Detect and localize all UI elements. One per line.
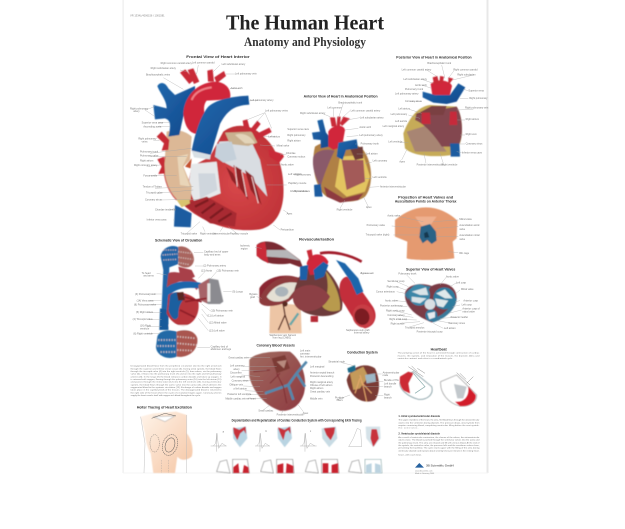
- labels: frontal view callouts: Chordae: [286, 152, 296, 155]
- labels: coronary callouts: Great cardiac vein: [228, 356, 249, 359]
- illustration: posterior heart: [403, 76, 465, 157]
- labels: circulation callouts: (13) Left valve: [209, 329, 225, 332]
- labels: circulation callouts: To head: [142, 272, 151, 275]
- text block: phase 1: empties remaining blood, completing ventricular filling before the next systole.: [398, 424, 480, 427]
- heading: anterior view: Anterior View of Heart in Anatomical Position: [304, 94, 378, 98]
- labels: circulation callouts: and arms: [143, 275, 154, 278]
- row 2: heart outlines and ventricles: [217, 459, 382, 473]
- labels: posterior view callouts: Left ventricle: [388, 141, 403, 144]
- poster sheet: [122, 0, 488, 474]
- labels: circulation callouts: (10) Pulmonary vein: [211, 309, 234, 312]
- labels: circulation callouts: (4) Tricuspid valve: [133, 318, 153, 321]
- labels: anterior view callouts: Brachiocephalic trunk: [338, 101, 363, 104]
- text block: circulation description: valve (6), it flows into the pulmonary trunk (7) and on into the right and left pulmonary: [131, 373, 222, 376]
- labels: superior view callouts: Anterior cusp of: [462, 307, 480, 310]
- labels: anterior view callouts: Left pulmonary artery: [359, 134, 384, 137]
- labels: anterior view callouts: Inferior vena cava: [290, 190, 310, 193]
- labels: frontal view callouts: Mitral valve: [277, 145, 290, 148]
- labels: coronary labels continued: Posterior descending: [310, 375, 334, 378]
- labels: circulation callouts: [133, 251, 244, 351]
- labels: superior view callouts: Aortic valve: [446, 276, 459, 279]
- illustration: coronary vessel heart: [249, 351, 307, 411]
- labels: frontal view callouts: Right common carotid artery: [161, 62, 193, 65]
- labels: revascularisation callouts: Internal artery: [354, 332, 370, 335]
- labels: projection callouts: Pulmonary valve: [367, 224, 386, 227]
- labels: superior view callouts: Coronary sinus: [448, 322, 466, 325]
- text block: phase 2: 2. Ventricular systole/atrial diastole: [398, 433, 441, 436]
- labels: frontal view callouts: Pulmonary trunk: [140, 151, 159, 154]
- text block: phase 2: As a result of ventricular contraction, the closure of the valves, the atrioventricular: [398, 436, 480, 439]
- labels: frontal view callouts: Left subclavian artery: [222, 63, 246, 66]
- labels: superior view callouts: Right atrial cusp: [389, 318, 408, 321]
- panel: projection of heart valves on anterior thorax: [366, 196, 480, 260]
- panel: posterior view of heart in anatomical position: [383, 55, 489, 167]
- labels: circulation callouts: (2) Pulmonary artery: [203, 265, 227, 268]
- labels: circulation callouts: ventricle: [140, 327, 150, 330]
- text block: circulation description: arteries (8). In the lungs (9) the blood releases carbon dioxide and takes up oxygen. It: [131, 375, 222, 378]
- labels: posterior view callouts: Coronary sinus: [466, 143, 483, 146]
- labels: coronary callouts: [225, 356, 309, 416]
- labels: anterior view callouts: Apex: [366, 206, 372, 209]
- text block: circulation description: through the superior and inferior venae cavae (3). During atrial systole, the blood flows: [131, 367, 222, 370]
- panel: frontal view of heart interior: [130, 55, 308, 235]
- labels: posterior view callouts: Right vein: [466, 133, 477, 136]
- labels: coronary labels continued: Right atrium: [310, 387, 323, 390]
- labels: coronary labels continued: Left marginal: [310, 366, 325, 369]
- labels: posterior view callouts: Left pulmonary: [391, 113, 408, 116]
- labels: posterior view callouts: Posterior interventricular: [417, 163, 444, 166]
- labels: frontal view callouts: Left common carotid: [192, 61, 215, 64]
- labels: coronary callouts: Posterior interventricular: [277, 413, 304, 416]
- text block: circulation description: systole, the blood flows through the aortic valve into the aorta (14), which delivers the: [131, 383, 222, 386]
- labels: superior view callouts: Coronary artery: [387, 314, 405, 317]
- labels: superior view callouts: Pulmonary trunk: [398, 272, 417, 275]
- labels: coronary labels continued: Obtuse of left atrium: [310, 384, 332, 387]
- labels: coronary callouts: Small cardiac: [258, 410, 274, 413]
- labels: posterior view callouts: Pulmonary trunk: [405, 88, 424, 91]
- logo: 3B Scientific: [415, 463, 454, 475]
- labels: frontal view callouts: artery: [133, 110, 140, 113]
- labels: frontal view callouts: [130, 61, 308, 235]
- labels: conduction callouts: Bundle of His: [384, 379, 400, 382]
- labels: frontal view callouts: Right subclavian artery: [151, 67, 177, 70]
- labels: posterior view callouts: Right subclavian: [457, 74, 476, 77]
- labels: circulation callouts: (14) Vena cava: [137, 299, 154, 302]
- labels: frontal view callouts: Right ventricle: [200, 232, 216, 235]
- labels: superior view callouts: Left cusp: [462, 303, 472, 306]
- labels: coronary callouts: Apex: [303, 412, 309, 415]
- labels: coronary callouts: artery: [233, 368, 240, 371]
- labels: frontal view callouts: Fossa ovalis: [143, 174, 158, 177]
- labels: conduction callouts: fibers: [337, 399, 343, 402]
- labels: superior view callouts: Conus arteriosus: [376, 291, 396, 294]
- labels: superior view callouts: Posterior aortic cusp: [380, 304, 403, 307]
- labels: coronary callouts: Circumflex: [230, 371, 242, 374]
- labels: revascularisation callouts: graft: [250, 296, 255, 299]
- labels: revascularisation callouts: Bypass: [249, 293, 258, 296]
- labels: revascularisation callouts: Saphenous vein graft: [346, 329, 370, 332]
- labels: frontal view callouts: Right pulmonary: [130, 107, 149, 110]
- labels: anterior view callouts: Right pulmonary: [287, 134, 306, 137]
- text block: heartbeat intro: muscle, the systole, and relaxation of the muscle, the diastole. Atria and: [398, 354, 480, 357]
- heading: projection of heart valves: Projection of Heart Valves and: [398, 196, 453, 200]
- labels: superior view callouts: Semilunar cusp: [387, 280, 405, 283]
- panel: holter tracing of heart excitation: [137, 405, 193, 473]
- heading: frontal view: Frontal View of Heart Interior: [186, 55, 251, 59]
- labels: frontal view callouts: Brachiocephalic veins: [146, 73, 171, 76]
- illustration: four valves: [405, 283, 457, 322]
- labels: frontal view callouts: Aortic arch: [231, 87, 243, 90]
- text block: phase 2: ventricular diastole and repeats about seventy times per minute in the resting heart.: [398, 449, 480, 452]
- text block: circulation description: [131, 365, 222, 397]
- labels: coronary callouts: Coronary sinus: [232, 380, 249, 383]
- labels: posterior view callouts: Inferior vena cava: [462, 151, 482, 154]
- text block: phase 1: [398, 415, 480, 430]
- text block: phase 1: valves into the ventricles during diastole. The pressure drops, atrial systole then: [398, 421, 480, 424]
- labels: circulation callouts: (12) Mitral valve: [209, 321, 227, 324]
- labels: conduction callouts: Right: [384, 394, 390, 397]
- labels: superior view callouts: Left cusp: [456, 282, 467, 285]
- labels: frontal view callouts: Superior vena cava: [142, 121, 164, 124]
- labels: circulation callouts: (13) Aorta: [201, 270, 213, 273]
- labels: superior view callouts: Right cusp: [387, 285, 399, 288]
- labels: anterior view callouts: Right coronary: [295, 173, 312, 176]
- labels: conduction callouts: Atrioventricular: [383, 371, 399, 374]
- text block: circulation description: Deoxygenated blood flows from the peripheral circulation (1) into the right atrium (2): [131, 365, 222, 368]
- labels: circulation callouts: Capillary bed of upper: [204, 251, 228, 254]
- heading: holter tracing: Holter Tracing of Heart Excitation: [137, 405, 192, 409]
- text block: phase 2: preventing the backflow. The cycle starts again with the filling of the atria during: [398, 447, 480, 450]
- labels: circulation callouts: (15) Pulmonary vein: [217, 270, 240, 273]
- labels: conduction callouts: node: [383, 374, 389, 377]
- labels: anterior view callouts: Left coronary: [373, 160, 388, 163]
- heading: heartbeat: Heartbeat: [431, 347, 448, 351]
- labels: posterior view callouts: Brachiocephalic trunk: [427, 62, 452, 65]
- illustration: conduction heart: [347, 365, 379, 402]
- illustration: large heart cross-section: [153, 68, 284, 230]
- heading: depolarization: Depolarization and Repolarization of Cardiac Conduction System with Corresponding EKG Tracing: [232, 419, 362, 423]
- labels: projection callouts: Rib cage: [459, 252, 470, 255]
- labels: anterior view callouts: Pulmonary trunk: [361, 143, 380, 146]
- labels: coronary callouts: Oblique vein: [229, 384, 244, 387]
- heading: conduction system: Conduction System: [347, 351, 378, 355]
- text block: heartbeat intro: ventricles contract and relax in a coordinated cycle.: [398, 357, 453, 360]
- labels: anterior view callouts: Left ventricle: [373, 176, 387, 179]
- labels: revascularisation callouts: Saphenous vein harvest: [269, 334, 296, 337]
- text block: phase 1: 1. Atrial systole/ventricular diastole: [398, 415, 441, 418]
- heading: posterior view: Posterior View of Heart in Anatomical Position: [396, 55, 472, 59]
- labels: posterior view callouts: [383, 62, 489, 167]
- heading: schematic view: Schematic View of Circulation: [155, 238, 202, 242]
- labels: anterior view callouts: Aortic arch: [359, 126, 372, 129]
- row 1: heart and EKG: b: [266, 431, 268, 433]
- panel: superior view of heart valves: [376, 267, 480, 333]
- labels: posterior view callouts: Superior vena: [468, 90, 484, 93]
- labels: posterior view callouts: Aortic arch: [415, 84, 427, 87]
- panel: revascularisation: [240, 237, 377, 340]
- sub-element: holter outlines: [141, 413, 187, 473]
- labels: conduction callouts: branch: [384, 396, 392, 399]
- text block: phase 2: heart, with each beat.: [398, 453, 422, 456]
- labels: superior view callouts: [376, 272, 480, 333]
- labels: anterior view callouts: Left common: [327, 106, 342, 109]
- labels: coronary labels continued: Ant. interventricular: [300, 356, 322, 359]
- labels: frontal view callouts: Tricuspid valve: [181, 232, 198, 235]
- illustration: revascularisation heart and arteries: [257, 241, 377, 333]
- labels: circulation callouts: (3) Pulmonary vein: [135, 293, 156, 296]
- row 1: heart and EKG: c: [310, 431, 312, 433]
- labels: frontal view callouts: Myocardium: [294, 190, 308, 193]
- labels: posterior view callouts: Right ventricle: [442, 164, 458, 167]
- labels: circulation callouts: (11) Left atrium: [207, 315, 224, 318]
- labels: frontal view callouts: Tendon of Todaro: [143, 185, 162, 188]
- labels: circulation callouts: abdomen and legs: [211, 348, 232, 351]
- labels: frontal view callouts: Papillary muscle: [288, 182, 307, 185]
- labels: anterior view callouts: Coronary sulcus: [287, 155, 306, 158]
- labels: frontal view callouts: veins: [142, 140, 148, 143]
- labels: posterior view callouts: Left common carotid artery: [402, 69, 432, 72]
- labels: posterior view callouts: Right pulmonary: [469, 97, 488, 100]
- labels: coronary labels continued: Right marginal artery: [310, 381, 334, 384]
- labels: circulation callouts: Capillary bed of: [211, 345, 228, 348]
- illustration: circulation diagram: [156, 246, 223, 358]
- labels: conduction callouts: Sinoatrial node: [328, 360, 346, 363]
- labels: projection callouts: Auscultation aortic: [459, 224, 480, 227]
- labels: anterior view callouts: Anterior interventricular: [380, 186, 406, 189]
- labels: superior view callouts: Right aortic cusp: [386, 309, 405, 312]
- labels: coronary labels continued: Great cardiac vein: [310, 390, 331, 393]
- text block: phase 2: the pulmonary trunk. The atria are relaxed and fill with venous blood. At the end of: [398, 441, 480, 444]
- labels: anterior view callouts: Right subclavian artery: [300, 112, 326, 115]
- text block: phase 1: The upper chambers of the heart, the atria, fill. Blood flows through the atrioventricular: [398, 419, 480, 422]
- labels: frontal view callouts: Chordae tendineae: [155, 209, 177, 212]
- labels: frontal view callouts: Left ventricle: [288, 173, 303, 176]
- labels: revascularisation callouts: Ischemic: [240, 245, 251, 248]
- labels: superior view callouts: Posterior leaflet: [451, 316, 468, 319]
- labels: projection callouts: Aortic valve: [387, 215, 401, 218]
- title: The Human Heart: [226, 10, 384, 34]
- text block: phase 2: the systole, the ventricles relax, the pressure falls and the semilunar valves close,: [398, 444, 480, 447]
- labels: posterior view callouts: Right atrium: [466, 118, 479, 121]
- labels: circulation callouts: (6) Right ventricle: [133, 333, 153, 336]
- labels: frontal view callouts: Aortic valve: [281, 164, 294, 167]
- text block: heartbeat intro: The pumping action of the heart is achieved through contraction of cardiac: [398, 352, 480, 355]
- labels: frontal view callouts: Right pulmonary: [138, 138, 157, 141]
- labels: coronary labels continued: Anterior septal branch: [310, 372, 335, 375]
- illustration: thorax with valves: [395, 207, 457, 260]
- labels: frontal view callouts: Pulmonary valve: [140, 154, 159, 157]
- labels: posterior view callouts: Left atrium: [398, 107, 410, 110]
- labels: frontal view callouts: Papillary muscle: [230, 232, 249, 235]
- labels: coronary callouts: Left marginal: [231, 375, 245, 378]
- panel: schematic view of circulation: [133, 238, 244, 358]
- panel: coronary blood vessels: [225, 344, 309, 416]
- panel: heartbeat: [398, 347, 480, 475]
- labels: frontal view callouts: Left pulmonary vein: [235, 73, 257, 76]
- illustration: ventricular systole diagram: [441, 373, 477, 406]
- labels: revascularisation callouts: region: [241, 247, 248, 250]
- labels: circulation callouts: (5) Right atrium: [136, 311, 153, 314]
- labels: coronary labels continued: Middle vein: [310, 397, 323, 400]
- labels: frontal view callouts: Interventricular: [213, 232, 230, 235]
- text block: phase 2: valves close. The blood is pushed through the semilunar valves into the aorta and: [398, 439, 480, 442]
- labels: conduction callouts: branch: [384, 386, 392, 389]
- labels: frontal view callouts: Ascending aorta: [143, 125, 162, 128]
- labels: frontal view callouts: Tricuspid valve: [146, 191, 163, 194]
- heading: revascularisation: Revascularisation: [299, 237, 334, 241]
- illustration: atrial systole diagram: [400, 366, 432, 399]
- labels: projection callouts: valve: [459, 228, 466, 231]
- labels: projection callouts: Auscultation mitral: [459, 234, 480, 237]
- labels: coronary callouts: of left atrium: [233, 387, 247, 390]
- illustration: anterior heart: [312, 117, 371, 203]
- labels: conduction callouts: Left bundle: [384, 382, 397, 385]
- labels: frontal view callouts: Inferior vena cava: [147, 219, 167, 222]
- labels: frontal view callouts: Pericardium: [281, 229, 294, 232]
- text block: circulation description: through the tricuspid valve (4) into the right ventricle (5), from where, via the pulmonary: [131, 370, 222, 373]
- labels: posterior view callouts: Left marginal artery: [383, 125, 405, 128]
- subtitle: Anatomy and Physiology: [244, 35, 367, 49]
- labels: superior view callouts: Left atrium: [444, 327, 456, 330]
- labels: posterior view callouts: Left auricle: [395, 120, 408, 123]
- logo: 3B Scientific: 3B Scientific GmbH: [426, 464, 454, 468]
- labels: anterior view callouts: Superior vena cava: [287, 128, 309, 131]
- labels: superior view callouts: mitral valve: [462, 311, 475, 314]
- labels: coronary callouts: Middle cardiac vein of heart: [225, 397, 256, 400]
- logo: 3B Scientific: www.3bscientific.com: [415, 469, 433, 472]
- text block: circulation description: the right side of the heart where the cycle of circulation begins again. Coronary arteries: [131, 391, 222, 394]
- labels: conduction callouts: Purkinje: [335, 396, 345, 399]
- catalog code: VR 1334L/4006156 / 1001581: [130, 14, 165, 18]
- row 1: heart and EKG: a: [223, 432, 225, 434]
- labels: frontal view callouts: Left pulmonary veins: [265, 110, 289, 113]
- labels: revascularisation callouts: Bypass vein: [361, 272, 375, 275]
- labels: frontal view callouts: Right coronary artery: [134, 164, 158, 167]
- panel: anterior view of heart in anatomical position: [287, 94, 406, 212]
- labels: revascularisation callouts: [240, 245, 375, 340]
- labels: posterior view callouts: Left pulmonary artery: [395, 93, 419, 96]
- heading: coronary blood vessels: Coronary Blood Vessels: [256, 344, 295, 348]
- labels: frontal view callouts: Apex: [287, 213, 293, 216]
- logo: 3B Scientific: Made in Germany 2006: [415, 473, 434, 475]
- labels: anterior view callouts: [287, 101, 406, 212]
- labels: circulation callouts: (9) Lungs: [232, 290, 244, 293]
- labels: frontal view callouts: Coronary sinus: [145, 199, 162, 202]
- labels: frontal view callouts: Left atrium: [268, 135, 280, 138]
- labels: coronary callouts: Left coronary: [230, 364, 245, 367]
- labels: anterior view callouts: Left common carotid artery: [351, 110, 381, 113]
- labels: superior view callouts: Right auricle: [391, 322, 405, 325]
- labels: posterior view callouts: Apex: [399, 160, 406, 163]
- panel: depolarization and repolarization: [211, 419, 382, 473]
- labels: projection callouts: valve: [459, 238, 466, 241]
- panel: projection of heart valves on anterior thorax: Auscultation Points on Anterior Thorax: [395, 200, 457, 204]
- illustration: torso back with electrodes: [141, 412, 193, 473]
- labels: superior view callouts: Anterior cusp: [463, 299, 479, 302]
- text block: phase 1: the ventricles.: [398, 427, 419, 430]
- labels: superior view callouts: Mitral valve: [461, 288, 474, 291]
- labels: posterior view callouts: Right common carotid: [453, 69, 478, 72]
- labels: anterior view callouts: Right ventricle: [337, 209, 353, 212]
- labels: posterior view callouts: Right pulmonary vein: [465, 107, 489, 110]
- labels: coronary callouts: Posterior left ventricle: [227, 393, 252, 396]
- labels: superior view callouts: Tricuspid annulus: [405, 326, 425, 329]
- text block: circulation description: supply the heart muscle itself with oxygen-rich blood throughout the cycle.: [131, 394, 201, 397]
- text block: circulation description: oxygenated blood to the systemic circulation (15). Exchange of carbon dioxide and oxygen: [131, 386, 222, 389]
- labels: superior view callouts: Aortic valve: [385, 299, 398, 302]
- text block: circulation description: takes place in the capillary beds of the tissues. The deoxygenated blood is returned to: [131, 389, 222, 392]
- text block: phase 2: [398, 433, 480, 456]
- text block: circulation description: and passes through the mitral valve (12) into the left ventricle (13). During ventricular: [131, 381, 222, 384]
- labels: revascularisation callouts: from leg (CABG): [273, 337, 291, 340]
- text block: circulation description: is returned with oxygen, flowing through the pulmonary veins (10) into the left atrium (11): [131, 378, 222, 381]
- labels: coronary labels continued: Left main: [300, 350, 311, 353]
- labels: coronary labels continued: coronary: [300, 352, 310, 355]
- panel: conduction system: [300, 350, 400, 402]
- labels: posterior view callouts: Coronary sinus: [405, 100, 422, 103]
- labels: frontal view callouts: Left pulmonary artery: [250, 99, 274, 102]
- labels: conduction callouts: [328, 360, 400, 402]
- labels: anterior view callouts: Left atrium: [366, 153, 378, 156]
- heading: superior view: Superior View of Heart Valves: [406, 267, 455, 271]
- labels: circulation callouts: body and arms: [204, 253, 221, 256]
- labels: projection callouts: Tricuspid valve (right): [366, 233, 389, 236]
- labels: projection callouts: [366, 215, 480, 255]
- labels: frontal view callouts: Right atrium: [140, 160, 153, 163]
- labels: superior view callouts: Posterior tricuspid cusp: [417, 330, 443, 333]
- labels: anterior view callouts: Left subclavian artery: [360, 116, 384, 119]
- labels: circulation callouts: (16) Right: [140, 325, 151, 328]
- labels: posterior view callouts: Left subclavian artery: [403, 78, 428, 81]
- labels: projection callouts: Mitral valve: [459, 218, 472, 221]
- labels: anterior view callouts: Right atrium: [287, 139, 301, 142]
- labels: circulation callouts: (8) Pulmonary valve: [134, 303, 157, 306]
- row 1: heart and EKG: [211, 427, 381, 452]
